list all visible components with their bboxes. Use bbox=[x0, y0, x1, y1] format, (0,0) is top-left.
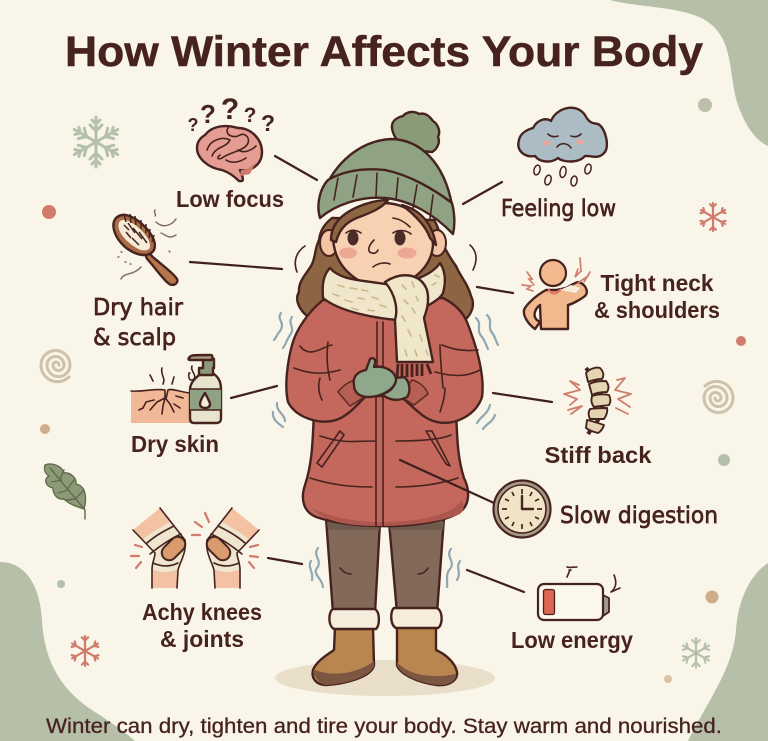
leader line: slow digestion bbox=[400, 460, 494, 503]
corner blob: bottom right bbox=[688, 563, 768, 741]
label line 2: & joints bbox=[160, 626, 244, 652]
item: stiff back bbox=[544, 368, 652, 468]
corner blob: top right bbox=[610, 0, 768, 146]
question marks: ? bbox=[221, 93, 239, 126]
decorative leaf bbox=[44, 464, 85, 519]
question marks: ? bbox=[200, 99, 216, 129]
item: dry hair and scalp bbox=[93, 210, 184, 351]
decorative snowflake: red bottom left bbox=[71, 636, 99, 666]
icon: wall clock bbox=[494, 480, 550, 538]
corner blob: bottom left bbox=[0, 562, 135, 741]
item: low energy bbox=[511, 567, 633, 653]
label: Feeling low bbox=[501, 196, 616, 222]
hair behind bbox=[295, 218, 476, 330]
ground shadow bbox=[275, 660, 495, 696]
jacket shoulders and arms bbox=[286, 298, 483, 423]
item: feeling low bbox=[501, 108, 616, 222]
icon: left bandaged knee bbox=[131, 508, 188, 588]
beanie band bbox=[318, 169, 454, 234]
label: Slow digestion bbox=[560, 503, 718, 529]
label: Dry skin bbox=[131, 431, 219, 457]
title: How Winter Affects Your Body bbox=[65, 28, 703, 76]
item: low focus bbox=[176, 93, 284, 212]
icon: nearly empty battery bbox=[538, 567, 620, 620]
label: Low energy bbox=[511, 627, 633, 653]
leader lines bbox=[190, 156, 552, 592]
item: achy knees and joints bbox=[131, 508, 262, 652]
decorative snowflake: sage top left bbox=[71, 117, 121, 167]
icon: right bandaged knee bbox=[192, 508, 259, 588]
jacket body bbox=[303, 380, 468, 526]
scarf bbox=[323, 263, 445, 377]
left boot bbox=[313, 609, 379, 685]
footer caption: Winter can dry, tighten and tire your body. Stay warm and nourished. bbox=[46, 715, 722, 738]
central character: girl in winter clothes bbox=[275, 112, 495, 696]
icon: sad rain cloud bbox=[518, 108, 607, 186]
question marks: ? bbox=[261, 110, 275, 136]
question marks: ? bbox=[188, 115, 198, 135]
beanie pompom bbox=[392, 112, 439, 152]
label line 2: & shoulders bbox=[594, 297, 720, 323]
item: dry skin bbox=[131, 355, 221, 457]
decorative spiral: right bbox=[704, 381, 733, 412]
decorative spiral: left bbox=[41, 350, 70, 382]
item: tight neck and shoulders bbox=[522, 258, 720, 329]
label line 2: & scalp bbox=[93, 325, 176, 351]
label: Achy knees bbox=[142, 599, 262, 625]
cold shiver marks bbox=[273, 313, 498, 587]
icon: hairbrush bbox=[113, 210, 177, 285]
right boot bbox=[391, 608, 457, 685]
face bbox=[320, 203, 446, 286]
question marks bbox=[188, 93, 275, 136]
hair fringe bbox=[331, 200, 436, 245]
question marks: ? bbox=[244, 104, 256, 127]
icon: brain with question marks bbox=[188, 93, 275, 181]
mittens bbox=[354, 358, 409, 400]
label: Stiff back bbox=[544, 442, 652, 468]
icon: spine with pain bolts bbox=[564, 368, 631, 434]
label: Low focus bbox=[176, 186, 284, 212]
leggings bbox=[326, 518, 444, 613]
decorative snowflake: red right bbox=[699, 203, 727, 231]
label: Tight neck bbox=[600, 270, 714, 296]
beanie crown bbox=[328, 139, 452, 205]
decorative snowflake: sage bottom right bbox=[681, 638, 711, 668]
decorative dots bbox=[40, 98, 746, 683]
item: slow digestion bbox=[494, 480, 718, 538]
icon: cracked skin and lotion bottle bbox=[131, 355, 221, 423]
icon: person holding neck bbox=[522, 258, 590, 329]
label: Dry hair bbox=[93, 295, 184, 321]
